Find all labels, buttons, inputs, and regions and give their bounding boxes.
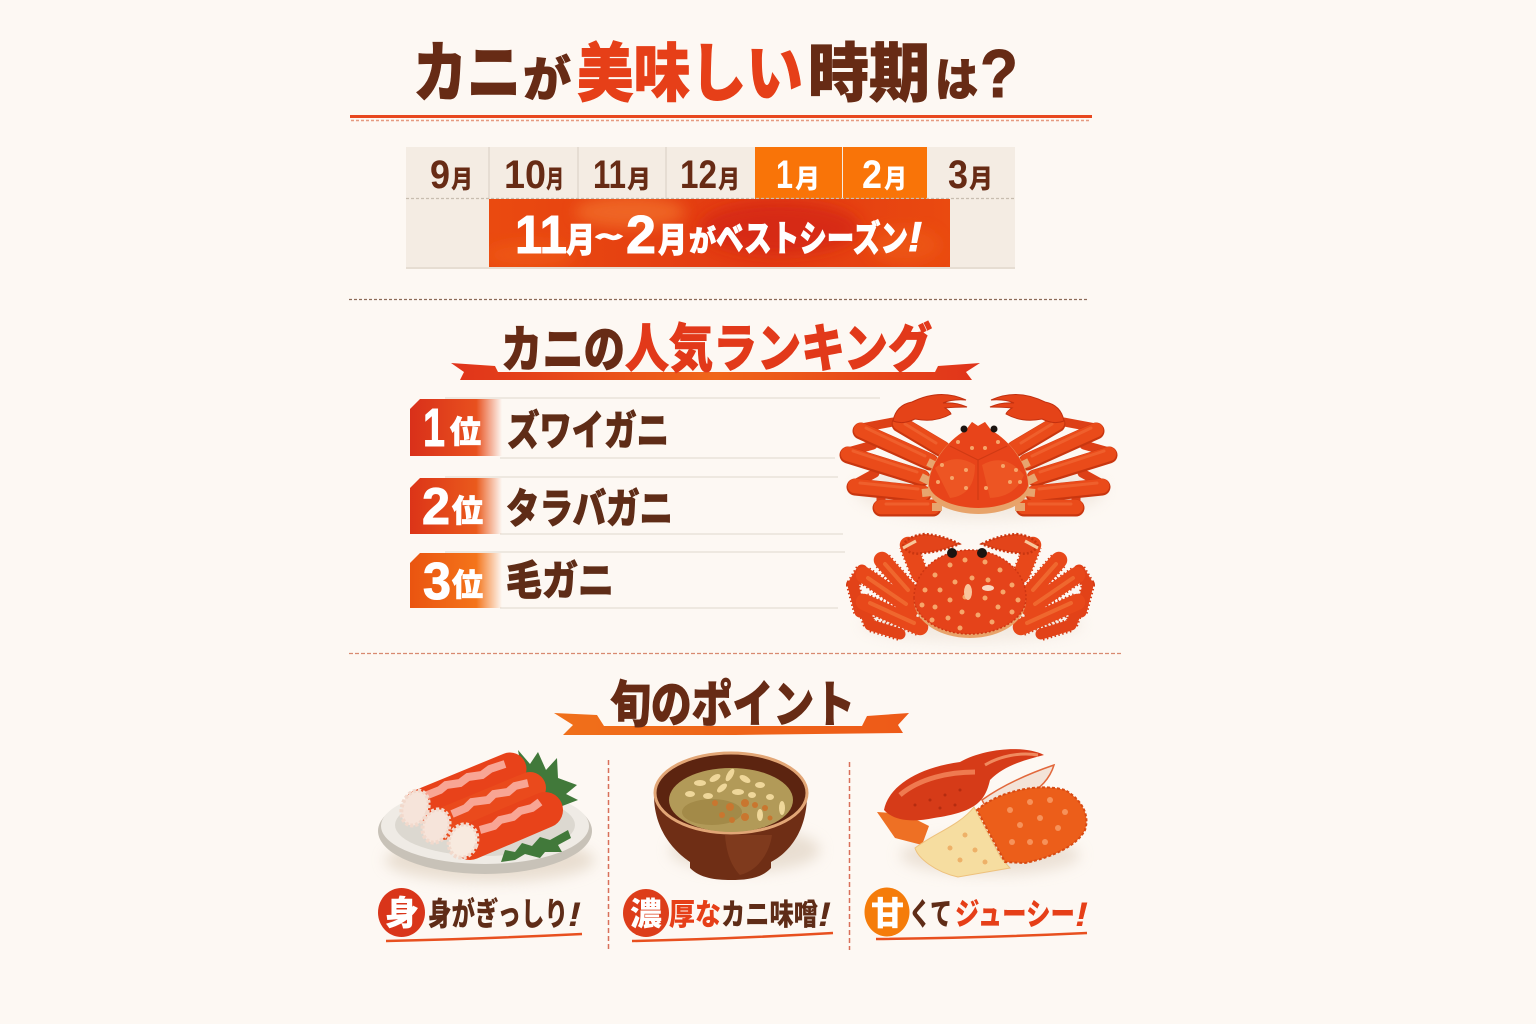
small claw piece	[877, 812, 929, 845]
title: ?	[980, 36, 1018, 112]
month labels: 2	[862, 153, 882, 197]
cream shell	[915, 807, 1010, 877]
crab roll 1	[397, 764, 510, 829]
title: 時期	[808, 23, 930, 115]
point label: sweet: !	[1075, 896, 1088, 934]
badge: 甘	[871, 887, 904, 935]
best season banner: が	[689, 218, 716, 260]
month labels: 9	[430, 153, 450, 197]
point label: sweet: くて	[909, 889, 952, 934]
title: カニ	[413, 20, 521, 116]
rank 1: 1	[423, 398, 445, 458]
month labels: 11	[593, 153, 626, 197]
best season banner: ~	[594, 213, 624, 257]
title underline	[350, 115, 1092, 120]
highlighted months	[755, 147, 927, 199]
best season banner: 月	[658, 213, 687, 262]
ranking heading: カニの	[501, 310, 625, 382]
ranking heading: 人気ランキング	[625, 307, 932, 382]
point label: miso: !	[818, 896, 831, 934]
best season banner: 月	[566, 213, 595, 262]
point label: sweet: ジューシー	[955, 889, 1075, 934]
month labels: 12	[680, 153, 717, 197]
rank 3: 毛ガニ	[506, 547, 614, 607]
rank 3	[410, 547, 614, 611]
point label: meat: !	[568, 896, 581, 934]
point heading: 旬のポイント	[610, 665, 855, 737]
month labels: 1	[776, 153, 793, 197]
rank 3: 位	[452, 560, 483, 605]
month labels: 10	[504, 153, 546, 197]
rank 2: 2	[422, 478, 450, 536]
divider: left column	[608, 760, 610, 950]
divider: right column	[848, 762, 850, 950]
pale pincer	[982, 765, 1054, 815]
rank 2	[410, 475, 673, 536]
leaves	[501, 750, 578, 862]
badge	[378, 886, 425, 937]
rank 1: 位	[450, 407, 481, 452]
ranking heading ribbon	[451, 363, 980, 380]
month labels: 月	[718, 160, 740, 196]
icon: snow crab	[848, 394, 1109, 520]
point label: meat	[378, 886, 582, 941]
panel: season calendar	[406, 147, 1015, 269]
crab roll 3	[444, 802, 545, 862]
badge	[623, 889, 669, 937]
illustration: bowl of crab miso	[654, 753, 820, 880]
illustration: crab legs on a plate	[378, 750, 595, 882]
point label: sweet	[864, 887, 1088, 939]
crab roll 2	[418, 783, 530, 846]
title: は	[935, 44, 978, 110]
red claw	[884, 749, 1044, 820]
best season banner	[485, 196, 950, 269]
title: が	[523, 40, 571, 110]
best season banner: 11	[515, 205, 567, 265]
point heading ribbon	[554, 713, 909, 735]
title	[413, 20, 1018, 116]
title: 美味しい	[577, 23, 803, 115]
point label: miso: 厚な	[669, 890, 721, 934]
icon: hairy crab	[853, 534, 1088, 641]
rank 1: ズワイガニ	[507, 397, 669, 457]
rank 1	[410, 397, 669, 458]
month labels: 月	[969, 159, 993, 196]
best season banner: !	[908, 213, 922, 260]
point label: miso	[623, 889, 833, 941]
month labels: 月	[884, 159, 907, 196]
rank 3: 3	[423, 553, 451, 611]
month labels: 3	[948, 153, 968, 197]
month labels: 月	[451, 160, 473, 196]
month labels: 月	[627, 160, 651, 196]
point label: meat: 身がぎっしり	[428, 889, 568, 935]
month labels	[430, 153, 993, 197]
month labels: 月	[546, 160, 564, 196]
month labels: 月	[795, 159, 820, 196]
orange shell	[977, 787, 1086, 863]
infographic canvas	[349, 40, 1121, 950]
badge: 身	[385, 886, 419, 935]
best season banner: ベストシーズン	[716, 210, 908, 262]
panel: ranking rows	[410, 397, 880, 611]
rank 2: タラバガニ	[506, 475, 673, 535]
best season banner: 2	[626, 205, 656, 265]
badge: 濃	[630, 889, 662, 935]
ranking heading	[501, 307, 932, 382]
point label: miso: カニ味噌	[721, 890, 818, 934]
illustration: crab claws	[877, 749, 1086, 877]
rank 2: 位	[452, 486, 483, 531]
